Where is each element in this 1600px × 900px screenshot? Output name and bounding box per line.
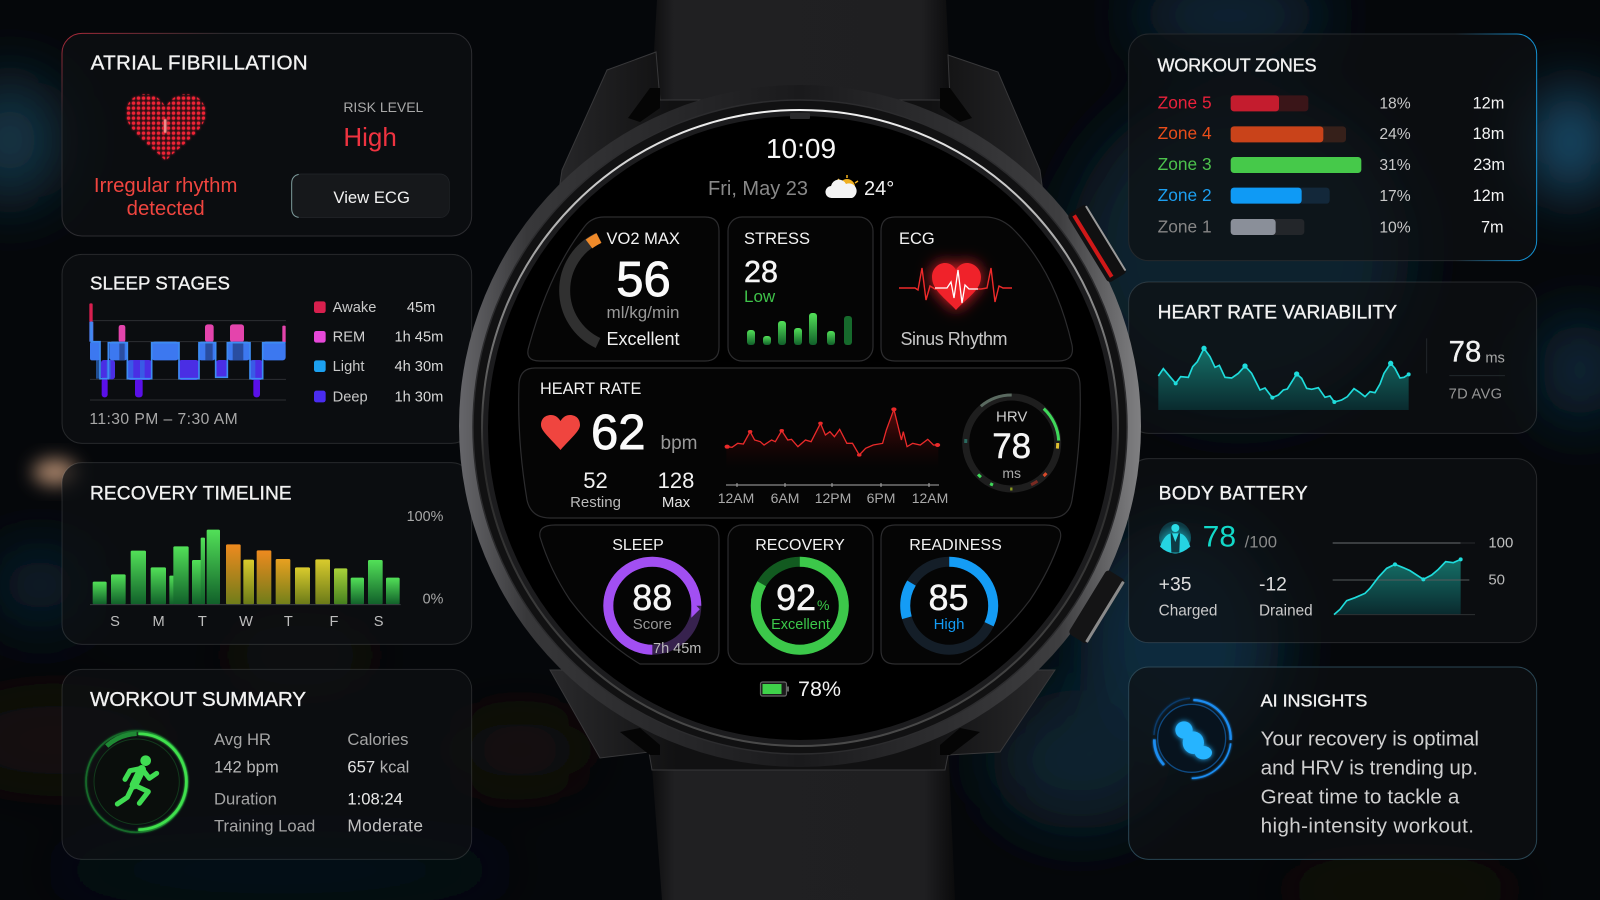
card: recovery score: % <box>817 597 829 613</box>
legend: sleep stages: 45m <box>407 300 435 316</box>
stats: charged and drained <box>1159 574 1313 620</box>
risk level value: High <box>343 122 397 152</box>
axis labels: weekdays: S <box>110 614 120 630</box>
stats: charged and drained: Drained <box>1259 603 1313 620</box>
panel: heart rate: 62 <box>591 406 646 460</box>
watch screen <box>519 133 1080 701</box>
stats: workout metrics: 657 kcal <box>347 758 409 777</box>
chart axis: 12AM <box>718 490 754 506</box>
chart axis: 12PM <box>815 490 851 506</box>
card: ecg <box>881 217 1072 361</box>
alert text: Irregular rhythm <box>94 175 237 197</box>
battery status <box>760 677 841 701</box>
chart axis: 6AM <box>771 490 799 506</box>
panel: body battery <box>1129 459 1537 643</box>
zone rows: Zone 1 <box>1158 217 1212 237</box>
chart axis: 6PM <box>867 490 895 506</box>
zone rows: 24% <box>1379 126 1411 143</box>
risk level label: RISK LEVEL <box>343 99 424 115</box>
axis labels: percent: 100% <box>407 509 444 525</box>
card: recovery score <box>728 525 873 664</box>
panel: heart rate variability <box>1129 282 1537 433</box>
panel: heart rate: Max <box>662 494 691 511</box>
legend: sleep stages: 1h 45m <box>394 330 443 346</box>
stats: charged and drained: +35 <box>1159 574 1191 595</box>
zone rows: 12m <box>1473 187 1504 205</box>
insight text: and HRV is trending up. <box>1261 757 1478 780</box>
zone rows: 12m <box>1473 94 1504 112</box>
gauge: hrv: ms <box>1002 465 1021 481</box>
time: 10:09 <box>766 133 836 164</box>
card: recovery score: Excellent <box>771 617 830 633</box>
heading: recovery timeline: RECOVERY TIMELINE <box>90 483 292 504</box>
heading: atrial fibrillation: ATRIAL FIBRILLATION <box>91 51 308 74</box>
stats: workout metrics: Training Load <box>214 817 315 836</box>
legend: sleep stages <box>314 300 443 406</box>
line chart: heart rate <box>725 407 940 468</box>
zone rows: Zone 3 <box>1158 154 1212 174</box>
gauge: hrv: 78 <box>992 427 1031 466</box>
axis labels: weekdays: T <box>284 614 293 630</box>
stats: workout metrics: Calories <box>347 730 408 749</box>
card: ecg: ECG <box>899 230 935 248</box>
watch: lower crown <box>1068 569 1126 645</box>
temperature: 24° <box>864 178 894 200</box>
chart: hypnogram <box>89 303 286 400</box>
zone rows: 7m <box>1481 219 1504 237</box>
axis labels: weekdays: S <box>374 614 384 630</box>
zone rows: Zone 5 <box>1158 92 1212 112</box>
legend: sleep stages: 1h 30m <box>394 390 443 406</box>
value: body battery score: 78 <box>1203 521 1236 554</box>
stats: workout metrics: 1:08:24 <box>347 789 403 808</box>
axis labels: weekdays: T <box>198 614 207 630</box>
zone rows: 31% <box>1379 157 1411 174</box>
stats: charged and drained: Charged <box>1159 603 1217 620</box>
stats: workout metrics: Avg HR <box>214 730 271 749</box>
gauge: hrv <box>964 395 1060 491</box>
heading: ai insights: AI INSIGHTS <box>1261 691 1367 711</box>
legend: sleep stages: Awake <box>333 300 376 316</box>
value: hrv average: ms <box>1485 350 1505 366</box>
legend: sleep stages: Light <box>333 359 364 375</box>
card: readiness score: High <box>934 616 964 633</box>
ring: recovery <box>756 562 844 650</box>
button: view ecg: View ECG <box>333 188 410 207</box>
ring: sleep <box>608 562 696 650</box>
zone rows: 10% <box>1379 220 1411 237</box>
card: sleep score: 88 <box>632 577 672 618</box>
card: sleep score <box>540 525 719 664</box>
heading: heart rate variability: HEART RATE VARIABILITY <box>1158 302 1397 323</box>
heading: workout zones: WORKOUT ZONES <box>1157 55 1317 75</box>
card: sleep score: 7h 45m <box>653 641 701 657</box>
line chart: hrv <box>1158 346 1411 410</box>
icon: partly cloudy <box>825 175 858 198</box>
heading: body battery: BODY BATTERY <box>1159 483 1308 504</box>
icon: heart <box>541 415 580 450</box>
card: readiness score <box>881 525 1061 664</box>
axis labels: weekdays: W <box>239 614 253 630</box>
card: stress <box>728 217 873 361</box>
axis labels: weekdays <box>110 614 384 630</box>
zone rows: 18m <box>1473 125 1504 143</box>
card: recovery score: 92 <box>776 577 816 618</box>
icon: person badge <box>1159 521 1191 553</box>
panel: workout zones <box>1129 34 1537 261</box>
card: stress: STRESS <box>744 230 810 248</box>
card: ecg: Sinus Rhythm <box>900 329 1008 349</box>
heading: sleep stages: SLEEP STAGES <box>90 272 230 293</box>
button: view ecg <box>292 174 449 218</box>
stats: workout metrics <box>214 730 423 836</box>
card: vo2 max: 56 <box>616 253 671 307</box>
zone rows: Zone 2 <box>1158 185 1212 205</box>
card: readiness score: READINESS <box>909 537 1002 554</box>
card: vo2 max: VO2 MAX <box>606 230 680 248</box>
card: vo2 max: ml/kg/min <box>606 303 680 322</box>
stats: workout metrics: Duration <box>214 789 277 808</box>
insight text: high-intensity workout. <box>1261 814 1474 837</box>
axis labels: weekdays: F <box>330 614 339 630</box>
panel: ai insights <box>1129 667 1537 859</box>
card: stress: 28 <box>744 255 778 289</box>
zone rows: 23m <box>1473 156 1505 174</box>
stats: workout metrics: Moderate <box>347 816 423 836</box>
watch: upper crown <box>1067 204 1127 283</box>
value: hrv average <box>1427 336 1505 402</box>
zone rows: 17% <box>1379 188 1411 205</box>
icon: ai orb <box>1154 698 1231 778</box>
ring: readiness <box>905 562 993 650</box>
heading: workout summary: WORKOUT SUMMARY <box>90 688 306 711</box>
card: sleep score: Score <box>633 616 672 633</box>
panel: workout summary <box>62 669 472 859</box>
zone rows: Zone 4 <box>1158 123 1212 143</box>
watch: straps <box>650 0 955 900</box>
icon: ecg heart <box>932 263 981 310</box>
axis labels: percent <box>407 509 444 607</box>
chart axis: 12AM <box>912 490 948 506</box>
card: stress: Low <box>744 287 776 306</box>
bar chart: stress <box>747 313 852 345</box>
alert text: detected <box>127 198 205 220</box>
ecg trace <box>899 268 1012 302</box>
zone rows <box>1158 92 1505 237</box>
icon: running figure ring <box>86 731 187 832</box>
card: readiness score: 85 <box>928 577 969 618</box>
panel: heart rate: HEART RATE <box>540 380 641 398</box>
axis labels: percent: 0% <box>423 591 444 607</box>
insight text: Great time to tackle a <box>1261 785 1460 808</box>
value: hrv average: 78 <box>1449 336 1481 369</box>
stats: charged and drained: -12 <box>1259 574 1287 595</box>
bar chart: recovery <box>90 530 401 605</box>
stats: workout metrics: 142 bpm <box>214 758 279 777</box>
value: hrv average: 7D AVG <box>1449 386 1502 402</box>
legend: sleep stages: 4h 30m <box>394 359 443 375</box>
panel: sleep stages <box>62 254 472 443</box>
chart: body battery trend: 100 <box>1488 535 1513 552</box>
value: out of 100: /100 <box>1245 532 1277 551</box>
icon: dotted heart <box>126 94 206 161</box>
panel: heart rate: bpm <box>660 433 697 454</box>
insight text: Your recovery is optimal <box>1261 728 1479 751</box>
battery status: 78% <box>798 677 841 701</box>
chart: body battery trend: 50 <box>1488 572 1505 589</box>
card: vo2 max <box>528 217 719 361</box>
gauge: hrv: HRV <box>996 408 1027 426</box>
axis labels: weekdays: M <box>153 614 165 630</box>
legend: sleep stages: REM <box>333 330 365 346</box>
panel: heart rate <box>519 368 1080 518</box>
panel: heart rate: Resting <box>570 494 621 511</box>
date: Fri, May 23 <box>708 178 808 200</box>
card: vo2 max: Excellent <box>606 329 680 349</box>
time range: 11:30 PM – 7:30 AM <box>89 411 238 428</box>
panel: heart rate: 52 <box>583 468 608 493</box>
card: sleep score: SLEEP <box>612 537 664 554</box>
watch: body and lugs <box>459 52 1141 770</box>
panel: recovery timeline <box>62 463 472 644</box>
panel: atrial fibrillation <box>62 33 472 236</box>
card: recovery score: RECOVERY <box>755 537 845 554</box>
panel: heart rate: 128 <box>658 468 694 493</box>
zone rows: 18% <box>1379 95 1411 112</box>
chart axis <box>718 483 948 506</box>
chart: body battery trend <box>1333 535 1513 615</box>
legend: sleep stages: Deep <box>333 390 368 406</box>
